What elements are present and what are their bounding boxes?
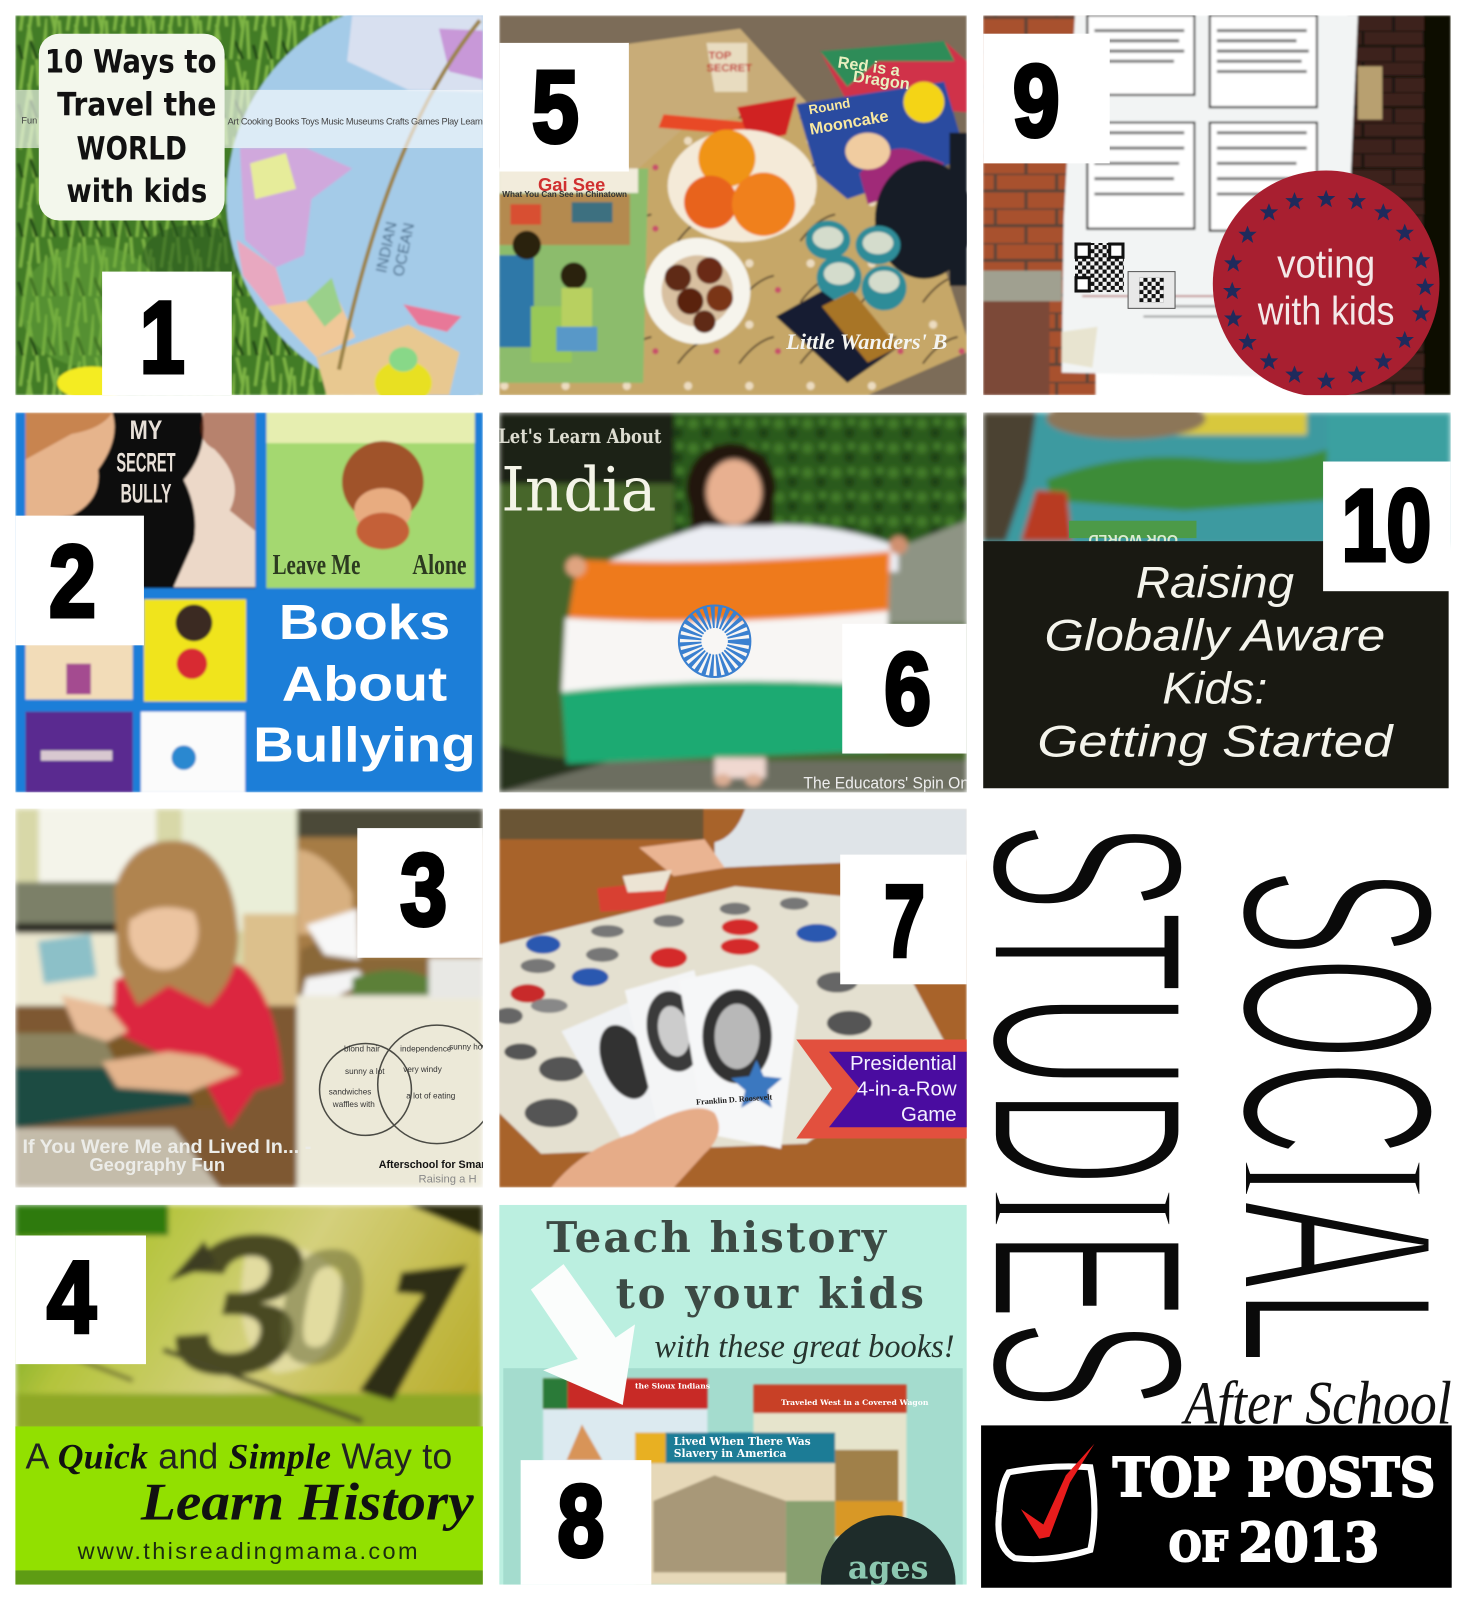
heading: a quick and simple way to learn history: A Quick and Simple Way to <box>26 1436 452 1476</box>
book cover titles <box>116 415 467 581</box>
heading: books about bullying: Books <box>279 596 450 650</box>
card name: Franklin D. Roosevelt <box>696 1092 773 1107</box>
banner bottom strip <box>15 1570 483 1585</box>
number badge 9 <box>983 34 1110 163</box>
ribbon banner: presidential 4-in-a-row game <box>796 1039 967 1138</box>
heading: teach history to your kids <box>546 1213 955 1365</box>
inner darker panel <box>503 1368 963 1585</box>
dark title block <box>983 541 1449 788</box>
heading: a quick and simple way to learn history: www.thisreadingmama.com <box>77 1538 418 1564</box>
book cover titles: BULLY <box>120 478 172 508</box>
banner: top posts of 2013: OF <box>1169 1523 1228 1571</box>
banner: green title strip <box>15 1426 483 1570</box>
number badge 8: 8 <box>557 1464 604 1578</box>
heading: raising globally aware kids: Globally Aware <box>1044 609 1385 660</box>
number badge 3 <box>357 828 483 958</box>
caption: if you were me: Raising a H <box>419 1173 477 1185</box>
mint background <box>499 1205 967 1585</box>
translucent navigation band: Art Cooking Books Toys Music Museums Crafts Games Play Learn <box>228 117 483 127</box>
number badge 2 <box>15 516 144 645</box>
caption: if you were me: If You Were Me and Lived In... - <box>22 1136 311 1158</box>
photo: globe on grass: INDIAN <box>373 220 401 274</box>
photo: books, oranges, tea set: TOP <box>708 50 732 62</box>
book cover titles: SECRET <box>116 448 176 478</box>
number badge 1: 1 <box>140 281 185 395</box>
map banner: our world: OUR WORLD <box>1088 531 1178 547</box>
number badge 4 <box>15 1235 146 1364</box>
photo: girl holding indian flag <box>499 413 967 792</box>
icon: ashoka chakra <box>679 605 750 677</box>
ribbon banner: presidential 4-in-a-row game: Game <box>901 1104 957 1126</box>
book titles and watermark: Red is a <box>837 54 902 80</box>
photo: children's world map <box>983 398 1451 545</box>
caption: if you were me: Geography Fun <box>89 1154 225 1175</box>
panel 1: 10 ways to travel the world <box>15 15 483 396</box>
heading: a quick and simple way to learn history: Learn History <box>140 1473 474 1531</box>
heading: raising globally aware kids: Getting Started <box>1037 716 1395 767</box>
heading: teach history to your kids: to your kids <box>616 1269 924 1318</box>
title card: Travel the <box>57 87 216 123</box>
heading text: TOP POSTS <box>1113 1446 1435 1509</box>
number badge 3: 3 <box>400 833 447 947</box>
venn diagram on paper: independence <box>400 1045 452 1054</box>
red badge: voting with kids: voting <box>1277 243 1375 287</box>
heading: let's learn about india: Let's Learn About <box>498 425 662 448</box>
photo: globe on grass: OCEAN <box>390 221 418 278</box>
heading: books about bullying: Bullying <box>253 719 476 773</box>
book titles and watermark: Dragon <box>852 68 911 94</box>
venn diagram on paper: sunny hot <box>449 1043 485 1052</box>
heading: let's learn about india: India <box>501 455 656 526</box>
number badge 5 <box>499 43 629 172</box>
panel 8: teach history to your kids <box>499 1205 967 1600</box>
venn diagram on paper: waffles with <box>332 1100 375 1109</box>
icon: checkbox with red check <box>998 1444 1094 1559</box>
photo: girl studying in kitchen <box>15 809 483 1187</box>
book cover titles: MY <box>130 415 163 445</box>
panel 9: voting with kids <box>983 15 1451 397</box>
banner: top posts of 2013 <box>981 1425 1452 1588</box>
photo: game board and cards on table <box>494 809 967 1187</box>
studies lettering: STUDIES <box>932 822 1241 1409</box>
map banner: our world <box>1069 521 1196 547</box>
heading: let's learn about india: The Educators' Spin On It <box>803 774 983 792</box>
photo: books, oranges, tea set: SECRET <box>706 62 752 74</box>
panel 7: presidential 4-in-a-row game <box>494 809 967 1187</box>
venn diagram on paper: sandwiches <box>329 1088 371 1097</box>
venn diagram on paper <box>320 1025 496 1144</box>
title block: social studies <box>932 822 1466 1437</box>
panel 4: learn history <box>15 1193 483 1585</box>
book titles: Slavery in America <box>674 1447 787 1460</box>
caption: if you were me <box>22 1136 495 1185</box>
panel 6: let's learn about india <box>498 413 983 792</box>
number badge 8 <box>521 1460 651 1585</box>
book titles and watermark: Little Wanders' B <box>785 329 947 354</box>
red badge: voting with kids <box>1213 171 1439 397</box>
number badge 10: 10 <box>1341 469 1431 583</box>
photo: blurred calendar date: 3 <box>153 1193 331 1416</box>
ribbon banner: presidential 4-in-a-row game: Presidential <box>850 1053 957 1075</box>
heading: raising globally aware kids: Kids: <box>1162 663 1267 714</box>
banner: top posts of 2013: 2013 <box>1238 1511 1379 1574</box>
heading: teach history to your kids: with these great books! <box>654 1329 955 1365</box>
photo: blurred calendar date: 0 <box>261 1215 384 1398</box>
title card <box>39 34 225 221</box>
panel 5: chinese culture books and food <box>499 15 973 395</box>
book titles and watermark: What You Can See in Chinatown <box>502 190 627 199</box>
number badge 1 <box>102 272 232 395</box>
translucent navigation band <box>15 90 483 148</box>
heading: teach history to your kids: Teach history <box>546 1213 888 1262</box>
arrow pointing to book <box>531 1264 635 1405</box>
photo: blurred calendar date <box>15 1193 483 1585</box>
number badge 5: 5 <box>532 50 579 164</box>
panel 2: books about bullying <box>15 413 483 792</box>
book titles and watermark: Gai See <box>538 174 605 195</box>
panel 3: geography fun <box>15 809 496 1187</box>
book cover titles: Leave Me <box>273 550 360 581</box>
venn diagram on paper: a lot of eating <box>406 1092 456 1101</box>
number badge 2: 2 <box>49 525 96 639</box>
number badge 7: 7 <box>884 865 925 979</box>
book titles: the Sioux Indians <box>635 1382 710 1391</box>
number badge 6 <box>842 624 967 754</box>
heading: let's learn about india <box>498 425 983 792</box>
book covers <box>543 1378 907 1585</box>
book titles and watermark: Mooncake <box>808 107 890 139</box>
book titles and watermark: Round <box>807 95 851 117</box>
photo: bullying book covers <box>15 413 483 792</box>
translucent navigation band: Fun <box>21 116 37 126</box>
heading: a quick and simple way to learn history <box>26 1436 474 1564</box>
title card: WORLD <box>77 131 187 167</box>
red badge: voting with kids: with kids <box>1257 290 1395 334</box>
book titles <box>635 1382 929 1460</box>
number badge 6: 6 <box>884 632 931 746</box>
venn diagram on paper: sunny a lot <box>345 1067 385 1076</box>
ages badge <box>821 1515 956 1600</box>
ribbon banner: presidential 4-in-a-row game: 4-in-a-Row <box>857 1079 957 1101</box>
number badge 7 <box>840 855 967 984</box>
photo: poster on brick wall <box>983 15 1451 395</box>
book titles: Traveled West in a Covered Wagon <box>781 1398 929 1407</box>
heading: books about bullying: About <box>282 657 447 711</box>
photo: globe on grass <box>15 15 483 396</box>
heading: books about bullying <box>253 596 476 773</box>
panel 10: raising globally aware kids <box>983 398 1451 788</box>
number badge 4: 4 <box>47 1240 96 1354</box>
book titles and watermark <box>502 54 947 354</box>
heading: raising globally aware kids: Raising <box>1136 556 1294 607</box>
caption: if you were me: Afterschool for Smarty <box>379 1159 495 1171</box>
heading: raising globally aware kids <box>1037 556 1395 767</box>
title card: 10 Ways to <box>45 44 216 80</box>
photo: books, oranges, tea set <box>499 15 973 395</box>
title card: with kids <box>66 174 207 210</box>
number badge 9: 9 <box>1013 44 1060 158</box>
icon: QR codes <box>1075 243 1175 308</box>
venn diagram on paper: blond hair <box>344 1045 380 1054</box>
book titles: Lived When There Was <box>674 1435 811 1448</box>
venn diagram on paper: very windy <box>403 1065 443 1074</box>
book cover titles: Alone <box>412 550 467 581</box>
ages badge: ages <box>848 1550 928 1587</box>
